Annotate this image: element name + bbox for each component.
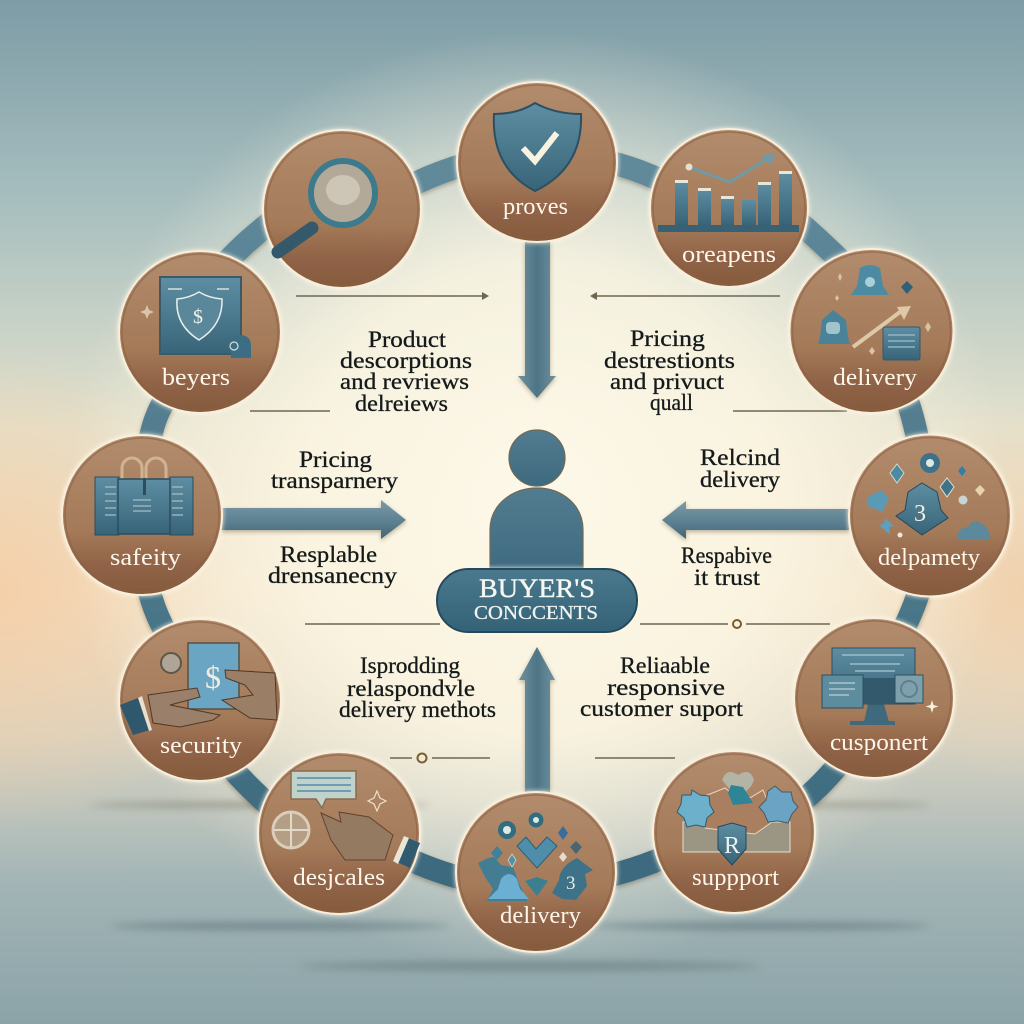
text: right middle: Respabive <box>681 543 772 568</box>
icon: shopping bags <box>95 458 193 535</box>
node: cusponert <box>794 618 954 778</box>
icon: delivery scene <box>818 265 931 360</box>
node: proves: proves <box>503 194 568 220</box>
text: upper left <box>340 327 472 416</box>
node: suppport <box>653 751 815 913</box>
arrow: top down to buyer <box>518 240 556 398</box>
icon: shield screen <box>140 277 251 358</box>
text: lower left <box>339 653 496 722</box>
icon: delivery badges: 3 <box>566 873 576 894</box>
node: beyers: beyers <box>162 365 230 391</box>
label: buyer's concerns: BUYER'S <box>479 574 595 603</box>
text: upper right <box>604 326 735 415</box>
text: left middle: drensanecny <box>268 563 398 588</box>
node: desjcales <box>258 752 420 914</box>
node: delivery upper right <box>790 249 954 413</box>
connecting ring <box>147 160 922 885</box>
text: upper left: descorptions <box>340 348 472 373</box>
icon: badge and sparkles <box>868 453 990 540</box>
icon: support badges <box>677 772 798 865</box>
label: buyer's concerns: CONCCENTS <box>474 602 598 624</box>
icon: handing payment card <box>120 643 277 735</box>
node: oreapens: oreapens <box>682 242 776 268</box>
node: search <box>263 130 421 288</box>
node: delpamety: delpamety <box>878 545 980 571</box>
label: buyer's concerns <box>437 569 637 632</box>
icon: bar chart <box>658 154 799 232</box>
node: beyers <box>119 251 281 413</box>
arrow: left to buyer <box>220 500 406 539</box>
node: delivery upper right: delivery <box>833 365 917 391</box>
icon: shield <box>494 103 581 191</box>
icon: shield screen: $ <box>193 306 203 328</box>
text: upper right: quall <box>650 390 693 415</box>
text: upper right: destrestionts <box>604 348 735 373</box>
icon: speech box and hand <box>273 771 420 868</box>
text: lower right: Reliaable <box>620 653 710 678</box>
text: left middle: Resplable <box>280 542 377 567</box>
icon: badge and sparkles: 3 <box>914 501 926 527</box>
text: right middle: delivery <box>700 467 781 492</box>
icon: delivery badges <box>478 812 593 901</box>
text: upper right: Pricing <box>630 326 706 351</box>
arrow: right to buyer <box>662 501 852 539</box>
node: proves <box>457 82 617 242</box>
text: right middle <box>681 445 781 590</box>
icon: handing payment card: $ <box>205 659 221 695</box>
central figure: buyer <box>490 430 583 575</box>
node: cusponert: cusponert <box>830 730 928 756</box>
node: safeity <box>62 435 222 595</box>
text: lower left: Isprodding <box>360 653 460 678</box>
node: security: security <box>160 733 242 759</box>
text: lower right: customer suport <box>580 696 744 721</box>
text: upper left: and revriews <box>340 369 469 394</box>
text: left middle <box>268 447 399 588</box>
text: lower right <box>580 653 744 721</box>
text: lower right: responsive <box>607 675 725 700</box>
node: delpamety <box>849 434 1011 596</box>
text: right middle: it trust <box>694 565 761 590</box>
node: delivery bottom: delivery <box>500 903 581 929</box>
icon: support badges: R <box>724 833 740 859</box>
node: security <box>119 619 281 781</box>
text: upper left: delreiews <box>355 391 448 416</box>
text: upper left: Product <box>368 327 447 352</box>
arrow: bottom up to buyer <box>519 647 555 795</box>
node: delivery bottom <box>456 792 616 952</box>
text: lower left: delivery methots <box>339 697 496 722</box>
text: left middle: transparnery <box>271 468 399 493</box>
node: oreapens <box>650 129 808 287</box>
node: desjcales: desjcales <box>293 865 385 891</box>
text: upper right: and privuct <box>610 369 725 394</box>
node: safeity: safeity <box>110 545 181 571</box>
icon: computer <box>822 648 938 725</box>
node: suppport: suppport <box>692 865 779 891</box>
text: right middle: Relcind <box>700 445 781 470</box>
text: lower left: relaspondvle <box>347 676 475 701</box>
icon: magnifier <box>278 161 375 252</box>
text: left middle: Pricing <box>299 447 373 472</box>
